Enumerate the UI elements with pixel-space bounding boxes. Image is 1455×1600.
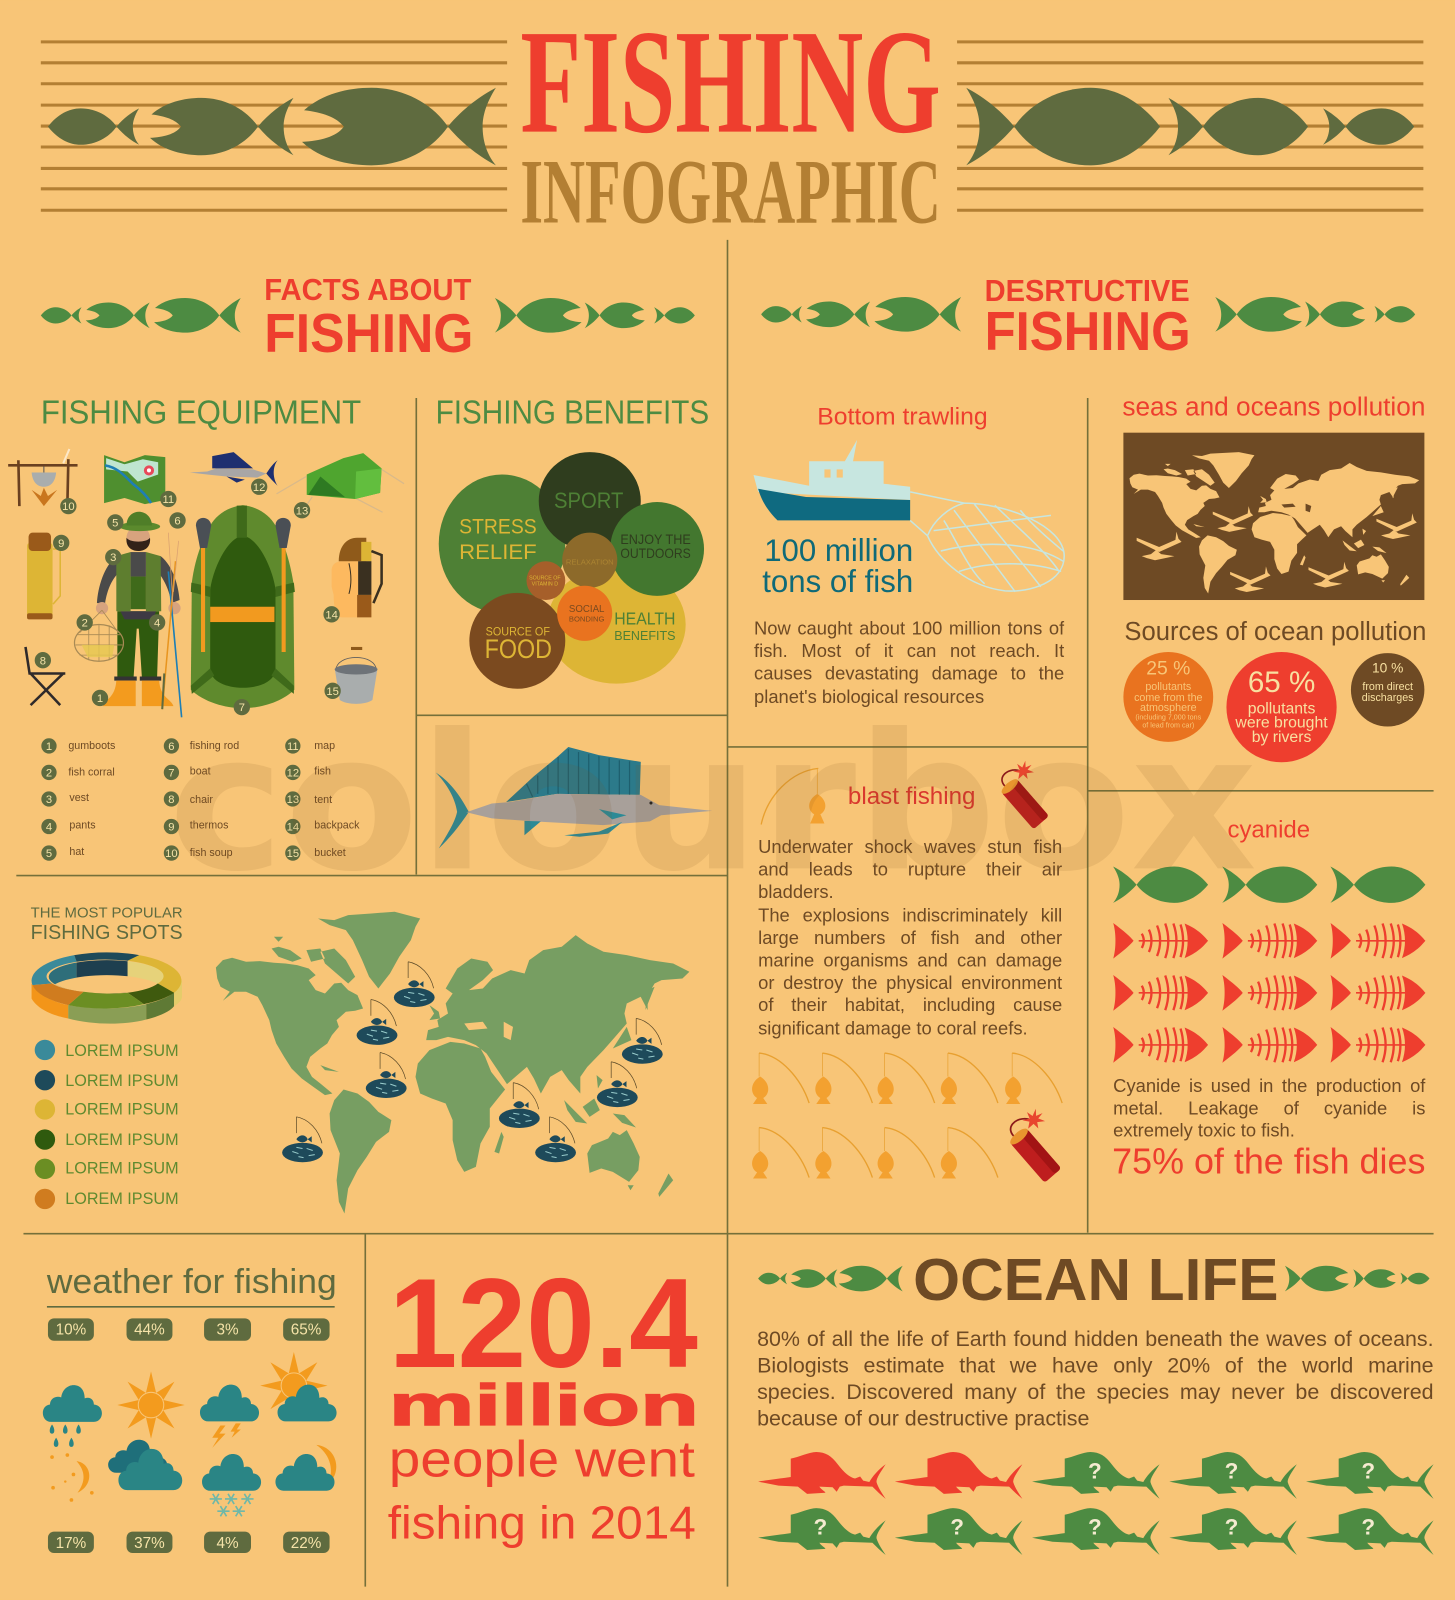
text: trawling description bbox=[754, 617, 1064, 711]
chart legend: LOREM IPSUM bbox=[65, 1100, 179, 1118]
heading: destructive fishing: DESRTUCTIVE bbox=[985, 274, 1190, 308]
icon: dynamite bbox=[994, 757, 1064, 829]
equipment legend: 5 bbox=[46, 848, 52, 860]
stat: 10 percent: from direct bbox=[1362, 681, 1413, 693]
heading: facts about fishing bbox=[264, 273, 473, 364]
text: blast description: Underwater shock waves stun fish bbox=[758, 837, 1062, 857]
header stripes: left bbox=[41, 42, 507, 210]
icon: bucket bbox=[335, 647, 378, 704]
percent badges top bbox=[48, 1318, 330, 1341]
heading: fishing spots: FISHING SPOTS bbox=[31, 922, 183, 944]
icons: unknown species: ? bbox=[1225, 1515, 1238, 1540]
text: ocean life description: because of our destructive practise bbox=[757, 1407, 1089, 1431]
icon: sailfish bbox=[436, 747, 712, 848]
bubble chart: BENEFITS bbox=[614, 628, 676, 643]
world map: fishing spots bbox=[216, 912, 689, 1214]
stat: 25 percent: of lead from car) bbox=[1142, 722, 1194, 730]
heading: pollution: seas and oceans pollution bbox=[1122, 393, 1425, 421]
stat: 65 percent bbox=[1226, 652, 1337, 762]
equipment legend: 14 bbox=[287, 822, 299, 834]
text: trawling description: fish. Most of it can not reach. It bbox=[754, 641, 1064, 661]
stat: 25 percent bbox=[1123, 652, 1213, 742]
stat: 10 percent: discharges bbox=[1362, 692, 1414, 704]
icons: unknown species: ? bbox=[813, 1515, 827, 1540]
equipment number badges: 8 bbox=[40, 655, 46, 667]
icons: live fish bbox=[1113, 866, 1425, 903]
text: cyanide description bbox=[1113, 1074, 1425, 1144]
text: ocean life description: 80% of all the life of Earth found hidden beneath the waves of oceans. bbox=[757, 1328, 1434, 1351]
heading: facts about fishing: FISHING bbox=[264, 302, 473, 364]
panel: seas and oceans pollution bbox=[1122, 393, 1426, 762]
stat: 100 million tons: tons of fish bbox=[762, 563, 913, 599]
equipment legend: hat bbox=[69, 846, 84, 858]
icons: unknown species: ? bbox=[1361, 1459, 1375, 1484]
title bbox=[520, 0, 941, 242]
text: trawling description: planet's biological resources bbox=[754, 686, 984, 707]
equipment number badges: 15 bbox=[326, 686, 339, 698]
icon: dynamite large bbox=[1002, 1104, 1078, 1183]
heading: destructive fishing bbox=[985, 274, 1191, 362]
percent badges top: 65% bbox=[291, 1322, 322, 1339]
icon: hunter bbox=[74, 512, 182, 717]
bubble chart: VITAMIN D bbox=[532, 582, 558, 588]
equipment number badges: 13 bbox=[296, 505, 308, 517]
text: blast description: significant damage to coral reefs. bbox=[758, 1018, 1028, 1038]
stat: 25 percent: 25 % bbox=[1146, 657, 1190, 679]
equipment number badges: 9 bbox=[58, 538, 64, 550]
panel: ocean life bbox=[757, 1246, 1434, 1555]
heading: ocean life: OCEAN LIFE bbox=[913, 1246, 1278, 1313]
equipment legend: bucket bbox=[314, 847, 346, 859]
panel: fishing spots bbox=[31, 905, 689, 1214]
stat: 120.4 million people: fishing in 2014 bbox=[388, 1497, 696, 1549]
icons: unknown species: ? bbox=[1088, 1459, 1102, 1484]
title: FISHING bbox=[520, 0, 941, 165]
stat: 65 percent: were brought bbox=[1234, 715, 1328, 732]
text: ocean life description: Biologists estimate that we have only 20% of the world marine bbox=[757, 1354, 1434, 1378]
stat: 120.4 million people: million bbox=[389, 1374, 699, 1438]
heading: fishing benefits: FISHING BENEFITS bbox=[436, 394, 709, 431]
bubble chart: RELIEF bbox=[459, 540, 537, 564]
equipment legend: 8 bbox=[168, 794, 175, 806]
icon: map bbox=[104, 455, 165, 504]
text: blast description bbox=[758, 836, 1062, 1040]
equipment legend: fish corral bbox=[68, 767, 115, 779]
icon: destructive fish left bbox=[761, 297, 961, 332]
icon: snow bbox=[202, 1454, 261, 1516]
bubble chart: OUTDOORS bbox=[620, 546, 691, 561]
equipment legend: fish bbox=[314, 765, 331, 777]
equipment legend: 12 bbox=[287, 768, 299, 780]
equipment legend: 11 bbox=[287, 741, 299, 753]
icon: rain bbox=[43, 1385, 102, 1447]
stat: 65 percent: by rivers bbox=[1252, 729, 1311, 746]
text: blast description: marine organisms and can damage bbox=[758, 950, 1062, 970]
bubble chart: SOURCE OF bbox=[486, 626, 550, 639]
icon: facts fish left bbox=[41, 298, 241, 333]
percent badges bottom: 4% bbox=[216, 1535, 239, 1552]
icons: rod row one bbox=[752, 1053, 1062, 1104]
text: blast description: The explosions indiscriminately kill bbox=[758, 905, 1062, 925]
equipment legend: 10 bbox=[165, 848, 178, 860]
percent badges top: 44% bbox=[134, 1322, 165, 1339]
3D donut chart bbox=[32, 952, 182, 1024]
panel: bottom trawling bbox=[754, 404, 1064, 711]
icon: ocean fish right bbox=[1285, 1266, 1429, 1291]
equipment number badges: 1 bbox=[97, 693, 103, 705]
text: blast description: bladders. bbox=[758, 882, 834, 902]
bubble chart: SOCIAL bbox=[569, 604, 605, 615]
equipment legend: 3 bbox=[46, 794, 52, 806]
bubble chart: RELAXATION bbox=[566, 557, 614, 566]
bubble chart bbox=[439, 452, 704, 689]
chart legend bbox=[35, 1040, 179, 1209]
equipment legend: tent bbox=[314, 794, 332, 806]
icon: cloud with moon bbox=[275, 1445, 336, 1491]
icon: header fish left bbox=[48, 88, 496, 165]
panel: blast fishing bbox=[752, 757, 1078, 1183]
heading: bottom trawling: Bottom trawling bbox=[817, 404, 988, 431]
equipment legend: thermos bbox=[190, 820, 228, 832]
heading: weather: weather for fishing bbox=[46, 1263, 337, 1301]
chart legend: LOREM IPSUM bbox=[65, 1042, 179, 1060]
equipment number badges: 5 bbox=[112, 518, 118, 530]
stat: 75 percent: 75% of the fish dies bbox=[1112, 1141, 1425, 1181]
icons: rod row two bbox=[752, 1128, 998, 1179]
equipment legend: backpack bbox=[314, 820, 360, 832]
stat: 120.4 million people: people went bbox=[389, 1430, 695, 1487]
icon: sun behind cloud bbox=[260, 1352, 337, 1421]
heading: destructive fishing: FISHING bbox=[985, 300, 1191, 362]
icons: unknown species: ? bbox=[1361, 1515, 1375, 1540]
bubble chart: STRESS bbox=[459, 515, 537, 539]
icon: ocean fish left bbox=[758, 1266, 903, 1291]
stat: 100 million tons bbox=[762, 532, 913, 599]
equipment number badges: 4 bbox=[154, 618, 160, 630]
panel: fishing benefits bbox=[436, 394, 709, 689]
world map: pollution bbox=[1123, 433, 1424, 600]
equipment number badges: 7 bbox=[239, 702, 245, 714]
equipment number badges: 12 bbox=[253, 482, 265, 494]
equipment legend: 4 bbox=[46, 822, 52, 834]
icon: inflatable boat bbox=[191, 505, 295, 708]
text: trawling description: Now caught about 100 million tons of bbox=[754, 618, 1064, 639]
bubble chart: SPORT bbox=[554, 488, 624, 513]
equipment number badges: 14 bbox=[325, 609, 338, 621]
icon: fish soup bbox=[8, 449, 78, 506]
equipment legend: pants bbox=[69, 820, 96, 832]
bubble chart: SOURCE OF bbox=[529, 576, 561, 582]
percent badges bottom: 37% bbox=[134, 1535, 165, 1552]
equipment legend: boat bbox=[190, 765, 211, 777]
stat: 10 percent bbox=[1351, 653, 1424, 727]
text: cyanide description: Cyanide is used in the production of bbox=[1113, 1075, 1425, 1096]
icon: chair bbox=[26, 647, 65, 705]
text: blast description: of their habitat, including cause bbox=[758, 995, 1062, 1016]
text: blast description: and leads to rupture their air bbox=[758, 859, 1062, 880]
bubble chart: ENJOY THE bbox=[620, 532, 691, 547]
icons: unknown species: ? bbox=[1225, 1459, 1238, 1484]
title: INFOGRAPHIC bbox=[520, 140, 941, 242]
icons: unknown species: ? bbox=[950, 1515, 964, 1540]
equipment legend: 7 bbox=[168, 768, 175, 780]
stat: 25 percent: pollutants bbox=[1145, 681, 1191, 693]
stat: 25 percent: atmosphere bbox=[1140, 702, 1197, 714]
percent badges bottom: 22% bbox=[291, 1535, 322, 1552]
icon: header fish right bbox=[966, 88, 1414, 165]
text: ocean life description bbox=[757, 1326, 1434, 1435]
bubble chart: HEALTH bbox=[614, 609, 675, 629]
chart legend: LOREM IPSUM bbox=[65, 1159, 179, 1177]
text: blast description: or destroy the physical environment bbox=[758, 973, 1062, 993]
header stripes: right bbox=[957, 42, 1423, 210]
equipment number badges: 2 bbox=[82, 618, 88, 630]
equipment legend: 2 bbox=[46, 768, 52, 780]
equipment legend: vest bbox=[69, 792, 89, 804]
icon: storm bbox=[200, 1385, 259, 1448]
percent badges top: 3% bbox=[216, 1322, 239, 1339]
stat: 120.4 million people: 120.4 bbox=[389, 1253, 698, 1395]
percent badges bottom bbox=[48, 1532, 330, 1553]
heading: cyanide: cyanide bbox=[1227, 817, 1310, 844]
equipment legend: fishing rod bbox=[190, 740, 239, 752]
heading: sources of ocean pollution: Sources of ocean pollution bbox=[1124, 618, 1426, 646]
stat: 10 percent: 10 % bbox=[1372, 660, 1403, 675]
equipment legend bbox=[41, 738, 360, 861]
icon: rod and fish bbox=[761, 768, 825, 824]
stat: 100 million tons: 100 million bbox=[764, 532, 913, 568]
equipment number badges: 10 bbox=[62, 501, 75, 513]
equipment legend: 6 bbox=[168, 741, 175, 753]
chart legend: LOREM IPSUM bbox=[65, 1190, 179, 1208]
icon: facts fish right bbox=[495, 298, 695, 333]
equipment legend: 15 bbox=[287, 848, 299, 860]
stat: 25 percent: (including 7,000 tons bbox=[1135, 713, 1202, 721]
icons: known species bbox=[758, 1452, 1022, 1499]
heading: facts about fishing: FACTS ABOUT bbox=[264, 273, 472, 307]
panel: cyanide bbox=[1112, 817, 1425, 1181]
percent badges top: 10% bbox=[56, 1322, 87, 1339]
heading: fishing spots bbox=[31, 905, 183, 944]
equipment number badges: 6 bbox=[174, 516, 181, 528]
icon: clouds bbox=[108, 1440, 182, 1490]
icon: trawler with net bbox=[754, 440, 1064, 592]
text: cyanide description: extremely toxic to fish. bbox=[1113, 1121, 1295, 1141]
equipment legend: 1 bbox=[46, 741, 52, 753]
stat: 65 percent: pollutants bbox=[1248, 700, 1315, 717]
heading: fishing spots: THE MOST POPULAR bbox=[31, 905, 183, 921]
panel: weather for fishing bbox=[43, 1263, 337, 1553]
percent badges bottom: 17% bbox=[56, 1535, 87, 1552]
heading: fishing equipment: FISHING EQUIPMENT bbox=[41, 394, 361, 431]
stat: 25 percent: come from the bbox=[1134, 692, 1203, 704]
text: ocean life description: species. Discovered many of the species may never be discovered bbox=[757, 1381, 1434, 1404]
icon: backpack bbox=[332, 538, 382, 617]
chart legend: LOREM IPSUM bbox=[65, 1131, 179, 1149]
equipment number badges: 3 bbox=[110, 552, 116, 564]
equipment legend: fish soup bbox=[190, 847, 233, 859]
equipment number badges: 11 bbox=[163, 494, 174, 506]
equipment legend: map bbox=[314, 740, 335, 752]
chart legend: LOREM IPSUM bbox=[65, 1072, 179, 1090]
bubble chart: BONDING bbox=[569, 614, 605, 623]
icon: thermos bbox=[27, 533, 60, 619]
text: cyanide description: metal. Leakage of cyanide is bbox=[1113, 1098, 1425, 1119]
stat: 65 percent: 65 % bbox=[1248, 666, 1315, 699]
panel: fishing equipment bbox=[8, 394, 404, 861]
equipment number badges bbox=[35, 479, 341, 715]
icons: fish skeletons bbox=[1113, 923, 1425, 1063]
icon: destructive fish right bbox=[1215, 297, 1415, 332]
icon: night bbox=[50, 1453, 94, 1502]
equipment legend: 9 bbox=[168, 822, 175, 834]
icon: small marlin bbox=[190, 452, 278, 486]
text: trawling description: causes devastating damage to the bbox=[754, 664, 1064, 684]
icon: sun bbox=[117, 1371, 185, 1439]
bubble chart: FOOD bbox=[485, 634, 552, 664]
icons: unknown species bbox=[758, 1452, 1434, 1555]
watermark: colourbox bbox=[168, 693, 1257, 913]
equipment legend: chair bbox=[190, 794, 213, 806]
heading: blast fishing: blast fishing bbox=[848, 783, 975, 810]
equipment legend: 13 bbox=[287, 794, 299, 806]
icon: tent bbox=[277, 453, 404, 512]
stat: 120.4 million people bbox=[388, 1253, 699, 1549]
equipment legend: gumboots bbox=[68, 740, 115, 752]
text: blast description: large numbers of fish and other bbox=[758, 927, 1062, 948]
icons: unknown species: ? bbox=[1088, 1515, 1102, 1540]
